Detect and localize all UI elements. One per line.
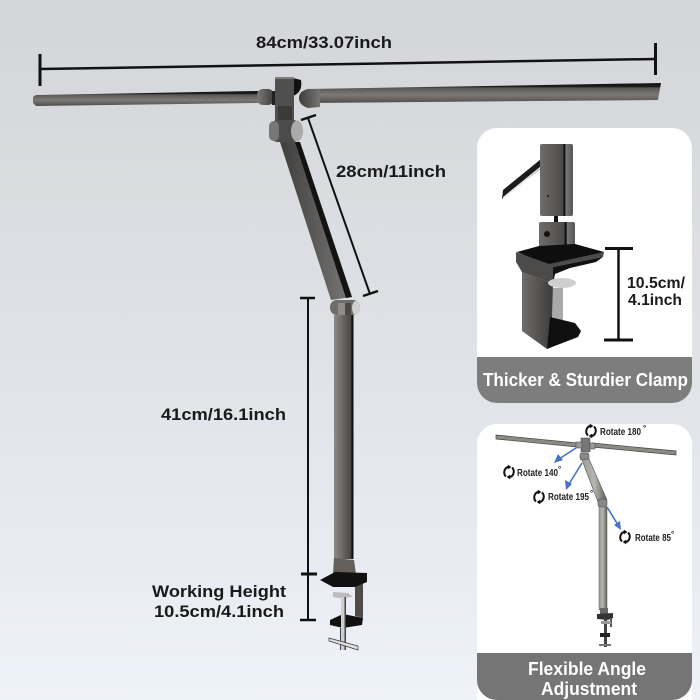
- rotate labels: Rotate 85: [635, 532, 671, 544]
- rotate labels: Rotate 195: [548, 491, 589, 503]
- lower post: [334, 315, 354, 559]
- dimension line: post height: [300, 298, 317, 620]
- angled arm: [280, 142, 352, 300]
- elbow joint: [330, 300, 360, 315]
- caption banner: [477, 653, 692, 700]
- panel background: [477, 424, 692, 700]
- dimension line: clamp height: [604, 248, 633, 340]
- label: clamp height: [627, 275, 686, 309]
- label: lamp width: 84cm/33.07inch: [256, 33, 392, 52]
- label: working height: Working Height: [152, 582, 286, 601]
- mini lamp illustration: [496, 435, 676, 647]
- dimension line: lamp width: [40, 43, 656, 86]
- top post: [275, 77, 301, 127]
- caption banner: [477, 357, 692, 403]
- rotate labels: °: [558, 465, 561, 474]
- caption: angle adjustment: [528, 659, 646, 699]
- label: working height: [152, 582, 286, 621]
- lamp: full lamp: [33, 77, 661, 650]
- label: clamp height: 4.1inch: [628, 292, 682, 309]
- light bar right: [308, 83, 661, 103]
- caption: angle adjustment: Flexible Angle: [528, 659, 646, 679]
- panel background: [477, 128, 692, 403]
- desk clamp: [320, 572, 367, 650]
- bar knobs: [257, 89, 320, 108]
- post collar: [333, 558, 356, 574]
- rotate labels: [504, 424, 674, 544]
- panel: angle adjustment: [477, 424, 692, 700]
- rotate labels: Rotate 140: [517, 467, 558, 479]
- label: arm length: 28cm/11inch: [336, 162, 446, 181]
- label: post height: 41cm/16.1inch: [161, 405, 286, 424]
- clamp illustration: [502, 144, 604, 349]
- rotate labels: °: [643, 424, 646, 433]
- caption: angle adjustment: Adjustment: [541, 679, 637, 699]
- upper joint: [269, 120, 303, 142]
- blue adjustment arrows: [554, 448, 621, 530]
- rotate labels: Rotate 180: [600, 426, 641, 438]
- label: working height: 10.5cm/4.1inch: [154, 602, 284, 621]
- rotate labels: °: [671, 530, 674, 539]
- rotate labels: °: [590, 489, 593, 498]
- light bar left: [33, 91, 258, 106]
- dimension line: arm length: [301, 115, 378, 296]
- label: clamp height: 10.5cm/: [627, 275, 686, 292]
- caption: clamp: Thicker & Sturdier Clamp: [483, 370, 688, 390]
- panel: clamp: [477, 128, 692, 403]
